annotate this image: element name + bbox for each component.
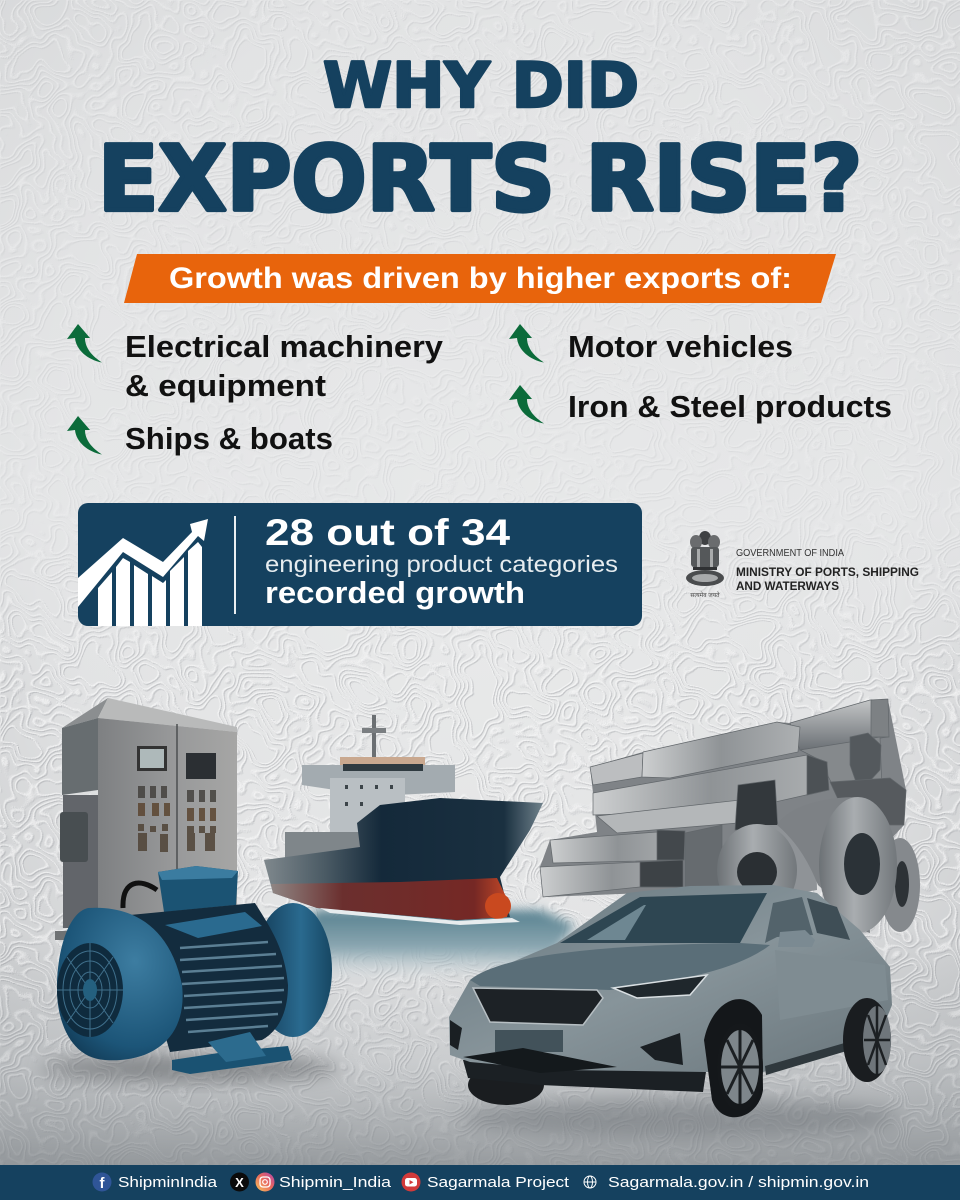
far front wheel xyxy=(468,1065,544,1105)
footer bar xyxy=(0,1165,960,1200)
side windows xyxy=(765,897,813,943)
illustration: cargo ship xyxy=(264,715,543,925)
instagram handle: Shipmin_India xyxy=(279,1174,392,1191)
finned body xyxy=(130,903,288,1052)
windshield xyxy=(560,893,767,943)
icon: facebook: f xyxy=(100,1175,106,1192)
statistic panel xyxy=(78,503,642,626)
illustration: control cabinet xyxy=(55,698,237,940)
item: electrical machinery: Electrical machinery xyxy=(125,329,444,364)
illustration: industrial products xyxy=(40,698,920,1138)
side door highlight xyxy=(775,950,888,1020)
illustration: electric motor xyxy=(40,866,340,1082)
ministry text: MINISTRY OF PORTS, SHIPPING xyxy=(736,565,919,579)
stat text: recorded growth xyxy=(265,575,525,610)
headlight xyxy=(613,975,707,998)
arrow icon: iron and steel xyxy=(509,385,544,424)
mirror xyxy=(778,930,815,947)
title xyxy=(98,49,862,232)
number plate xyxy=(495,1030,563,1052)
icon: X xyxy=(230,1172,249,1192)
lower bumper xyxy=(463,1060,707,1092)
ministry text: AND WATERWAYS xyxy=(736,579,839,593)
youtube channel: Sagarmala Project xyxy=(427,1174,570,1191)
illustration: steel beams xyxy=(540,699,906,897)
stat text: engineering product categories xyxy=(265,551,618,577)
icon: youtube xyxy=(402,1172,420,1192)
title: EXPORTS RISE? xyxy=(98,127,862,232)
illustration: car xyxy=(449,885,900,1138)
stat text xyxy=(265,512,618,610)
body xyxy=(449,885,892,1072)
title: WHY DID xyxy=(323,49,639,122)
arrow icon: electrical machinery xyxy=(67,324,102,362)
arrow icon: motor vehicles xyxy=(509,324,544,362)
item: electrical machinery: & equipment xyxy=(125,368,326,403)
rear wheel xyxy=(843,998,891,1082)
rear end cap xyxy=(254,903,332,1037)
icon: growth chart xyxy=(78,519,208,626)
base xyxy=(172,1046,292,1074)
front wheel xyxy=(704,999,763,1117)
icon: instagram xyxy=(256,1172,274,1192)
illustration: steel coils xyxy=(717,797,920,933)
front end cap xyxy=(57,908,183,1060)
water under ship xyxy=(300,910,575,982)
facebook handle: ShipminIndia xyxy=(118,1174,218,1191)
lower intake xyxy=(463,1048,617,1073)
ministry logo xyxy=(686,531,919,599)
fan cover xyxy=(57,943,123,1037)
icon: globe xyxy=(584,1176,596,1188)
grille xyxy=(473,988,603,1025)
icon: facebook xyxy=(92,1172,112,1192)
item: motor vehicles: Motor vehicles xyxy=(568,329,793,364)
item: ships and boats: Ships & boats xyxy=(125,421,333,456)
icon: state emblem xyxy=(686,531,724,599)
stat text: 28 out of 34 xyxy=(265,512,510,553)
arrow icon: ships xyxy=(67,416,102,454)
icon: X: X xyxy=(235,1175,244,1190)
ministry text xyxy=(736,548,919,593)
hood xyxy=(470,943,770,990)
orange banner xyxy=(124,254,836,303)
websites: Sagarmala.gov.in / shipmin.gov.in xyxy=(608,1174,869,1191)
orange banner: Growth was driven by higher exports of: xyxy=(169,262,792,295)
icon: state emblem: सत्यमेव जयते xyxy=(690,591,720,599)
side sill xyxy=(765,1042,850,1075)
ministry text: GOVERNMENT OF INDIA xyxy=(736,548,844,559)
item: iron and steel: Iron & Steel products xyxy=(568,389,892,424)
terminal box xyxy=(158,866,238,912)
list of export products xyxy=(67,324,892,456)
